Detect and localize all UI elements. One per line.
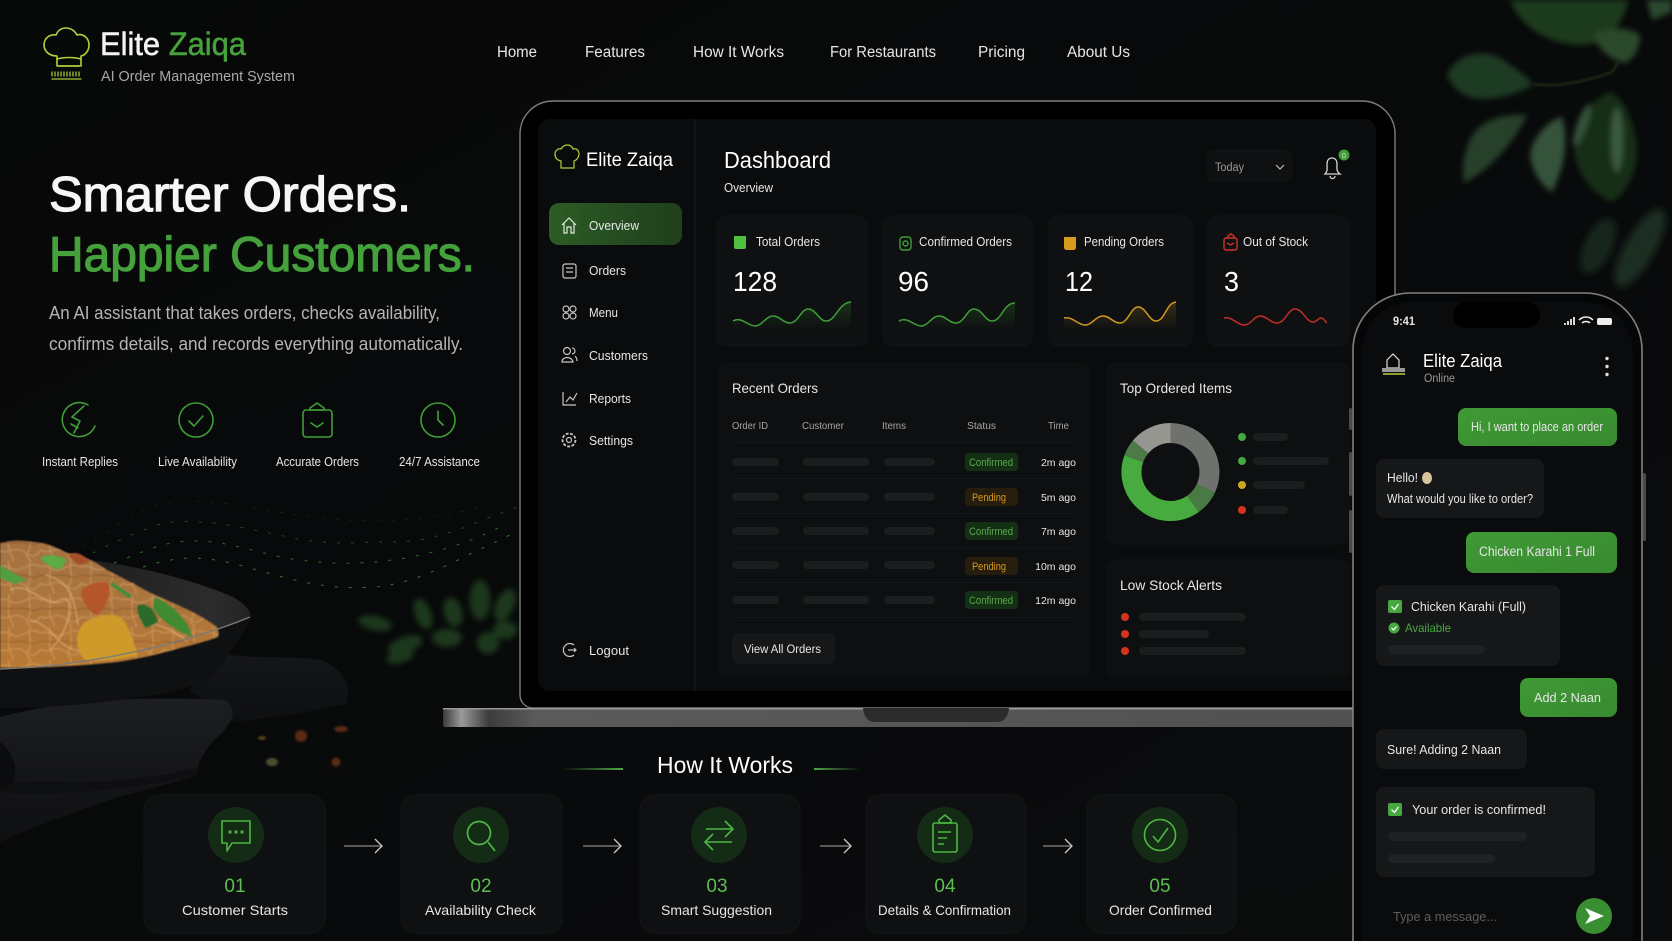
table row 1 <box>732 453 1076 471</box>
menu: menu: Menu <box>589 305 618 320</box>
active menu item: Overview <box>589 218 640 233</box>
dotted data waves <box>82 500 518 588</box>
logo <box>44 26 295 85</box>
feature: 24/7 assistance: 24/7 Assistance <box>399 455 480 469</box>
step 1: 01 <box>224 876 246 897</box>
dynamic island <box>1453 302 1540 328</box>
message: adding naan: Sure! Adding 2 Naan <box>1387 742 1501 757</box>
step 4: 04 <box>934 876 956 897</box>
step 5: 05 <box>1149 876 1171 897</box>
dashboard heading <box>724 147 831 195</box>
message: chicken karahi: Chicken Karahi 1 Full <box>1479 544 1595 559</box>
feature: accurate orders: Accurate Orders <box>276 455 359 469</box>
table row 2 <box>732 488 1076 506</box>
top ordered items panel: Top Ordered Items <box>1120 380 1232 396</box>
stat card: total orders: 128 <box>733 266 777 297</box>
step 2: 02 <box>470 876 492 897</box>
step 2 <box>401 795 562 933</box>
blurred herb plant <box>357 580 520 666</box>
message input: Type a message... <box>1393 909 1497 924</box>
stat card: confirmed orders: 96 <box>898 266 929 297</box>
hero headline <box>49 168 475 282</box>
bowl rim highlight <box>0 617 250 669</box>
tagline: AI Order Management System <box>101 68 295 85</box>
napkin cloth <box>0 653 348 842</box>
laptop lid <box>520 101 1395 708</box>
sidebar <box>549 119 695 691</box>
table header: Status <box>967 420 996 432</box>
step 5: Order Confirmed <box>1109 902 1212 918</box>
hero description: An AI assistant that takes orders, checks availability, <box>49 303 440 323</box>
phone body <box>1353 293 1642 941</box>
feature: 24/7 assistance <box>399 403 480 469</box>
feature: instant replies <box>42 403 118 469</box>
chat logo <box>1382 354 1405 375</box>
arrow 1 <box>344 839 382 853</box>
table header: Order ID <box>732 420 768 432</box>
menu: customers <box>562 348 648 363</box>
notification bell <box>1325 150 1350 178</box>
brand name: Elite Zaiqa <box>100 26 246 62</box>
top navigation: Home <box>497 44 537 61</box>
arrow 3 <box>820 839 851 853</box>
stat card: total orders <box>716 215 868 347</box>
phone screen <box>1362 302 1633 941</box>
table row 4: 10m ago <box>1035 561 1076 573</box>
view all orders button: View All Orders <box>744 644 821 656</box>
top navigation: Features <box>585 44 645 61</box>
recent orders panel: Recent Orders <box>732 380 818 396</box>
date filter: Today <box>1215 162 1244 174</box>
step 2: Availability Check <box>425 902 537 918</box>
top navigation: For Restaurants <box>830 44 936 61</box>
step 4 <box>866 795 1026 933</box>
menu: orders: Orders <box>589 263 626 278</box>
step 3 <box>640 795 800 933</box>
active menu item <box>549 203 682 245</box>
donut chart <box>1131 433 1209 511</box>
menu: logout <box>563 643 629 658</box>
noodle strands <box>10 575 188 651</box>
menu: settings <box>562 433 633 448</box>
menu: settings: Settings <box>589 433 633 448</box>
step 3: 03 <box>706 876 728 897</box>
dashboard heading: Dashboard <box>724 147 831 173</box>
menu: customers: Customers <box>589 348 648 363</box>
feature: live availability: Live Availability <box>158 455 238 469</box>
message: place an order <box>1458 408 1617 446</box>
table row 3 <box>732 522 1076 540</box>
message: adding naan <box>1376 729 1527 769</box>
top navigation: About Us <box>1067 44 1130 61</box>
bowl interior <box>60 560 250 655</box>
message: hello <box>1376 459 1544 518</box>
recent orders panel <box>717 362 1091 679</box>
chat header: Elite Zaiqa <box>1423 351 1503 371</box>
message: availability card: Available <box>1405 621 1451 635</box>
table header: Time <box>1048 420 1069 432</box>
message input <box>1393 898 1612 934</box>
stat card: total orders: Total Orders <box>756 235 820 249</box>
table header <box>732 420 1069 432</box>
phone side buttons <box>1349 408 1646 553</box>
menu: reports: Reports <box>589 391 631 406</box>
feature: instant replies: Instant Replies <box>42 455 118 469</box>
phone <box>1349 293 1646 941</box>
stat card: pending orders: 12 <box>1065 266 1093 297</box>
view all orders button <box>732 633 835 664</box>
arrow 2 <box>583 839 621 853</box>
hero headline: Happier Customers. <box>49 228 475 282</box>
chat header <box>1382 351 1609 385</box>
feature row <box>42 403 480 469</box>
step 1: Customer Starts <box>182 902 288 918</box>
feature: live availability <box>158 403 238 469</box>
table row 3: 7m ago <box>1041 526 1076 538</box>
table row 2: Pending <box>972 492 1006 504</box>
status bar: 9:41 <box>1393 314 1415 328</box>
table row 2: 5m ago <box>1041 492 1076 504</box>
message: order confirmed <box>1376 787 1595 877</box>
menu: orders <box>563 263 626 278</box>
vegetables and herbs <box>0 553 192 661</box>
step 3: Smart Suggestion <box>661 902 772 918</box>
message: chicken karahi <box>1466 532 1617 573</box>
message: place an order: Hi, I want to place an order <box>1471 420 1603 434</box>
laptop screen <box>538 119 1376 691</box>
low stock alerts panel <box>1106 559 1350 679</box>
message: hello: Hello! <box>1387 471 1418 485</box>
message: add naan: Add 2 Naan <box>1534 690 1601 705</box>
food bowl with noodles <box>0 541 250 708</box>
table row 5: Confirmed <box>969 595 1013 607</box>
message: availability card <box>1376 585 1560 666</box>
stat card: pending orders: Pending Orders <box>1084 235 1164 249</box>
menu: logout: Logout <box>589 643 629 658</box>
dashboard heading: Overview <box>724 181 774 195</box>
stat card: out of stock: 3 <box>1224 266 1239 297</box>
table header: Customer <box>802 420 844 432</box>
stat card: out of stock <box>1207 215 1350 347</box>
stat card: pending orders <box>1048 215 1193 347</box>
status bar <box>1393 314 1612 328</box>
bowl exterior <box>0 618 250 708</box>
step 4: Details & Confirmation <box>878 902 1011 918</box>
table row 1: Confirmed <box>969 457 1013 469</box>
feature: accurate orders <box>276 403 359 469</box>
step 1 <box>144 795 325 933</box>
table row 5 <box>732 591 1076 609</box>
menu: menu <box>563 305 618 320</box>
sidebar logo: Elite Zaiqa <box>586 150 673 171</box>
table row 1: 2m ago <box>1041 457 1076 469</box>
laptop <box>443 101 1395 727</box>
laptop base <box>443 708 1358 727</box>
table row 4 <box>732 557 1076 575</box>
message: add naan <box>1520 678 1617 717</box>
icon: chef hat <box>44 28 89 79</box>
hero description: confirms details, and records everything automatically. <box>49 334 463 354</box>
arrow 4 <box>1043 839 1072 853</box>
top ordered items panel <box>1106 362 1350 545</box>
top navigation: Pricing <box>978 44 1025 61</box>
message: availability card: Chicken Karahi (Full) <box>1411 599 1526 614</box>
stat card: out of stock: Out of Stock <box>1243 235 1309 249</box>
noodles <box>0 541 219 668</box>
menu: reports <box>563 391 631 406</box>
table row 3: Confirmed <box>969 526 1013 538</box>
low stock alerts panel: Low Stock Alerts <box>1120 577 1222 593</box>
message: order confirmed: Your order is confirmed! <box>1412 802 1546 817</box>
hero headline: Smarter Orders. <box>49 168 411 222</box>
donut legend <box>1238 433 1329 514</box>
top navigation: How It Works <box>693 44 784 61</box>
decorative leaves top right <box>1447 0 1672 294</box>
table row 4: Pending <box>972 561 1006 573</box>
message: hello: What would you like to order? <box>1387 492 1533 506</box>
stat card: confirmed orders <box>882 215 1033 347</box>
date filter <box>1206 149 1293 183</box>
sidebar logo <box>555 145 673 171</box>
hero description <box>49 303 463 354</box>
spice crumbs <box>258 726 348 766</box>
notification bell: 0 <box>1342 153 1346 160</box>
top navigation <box>497 44 1130 61</box>
how it works heading: How It Works <box>657 752 793 778</box>
stat card: confirmed orders: Confirmed Orders <box>919 235 1012 249</box>
table header: Items <box>882 420 906 432</box>
table row 5: 12m ago <box>1035 595 1076 607</box>
chat header: Online <box>1424 373 1455 385</box>
step 5 <box>1087 795 1236 933</box>
